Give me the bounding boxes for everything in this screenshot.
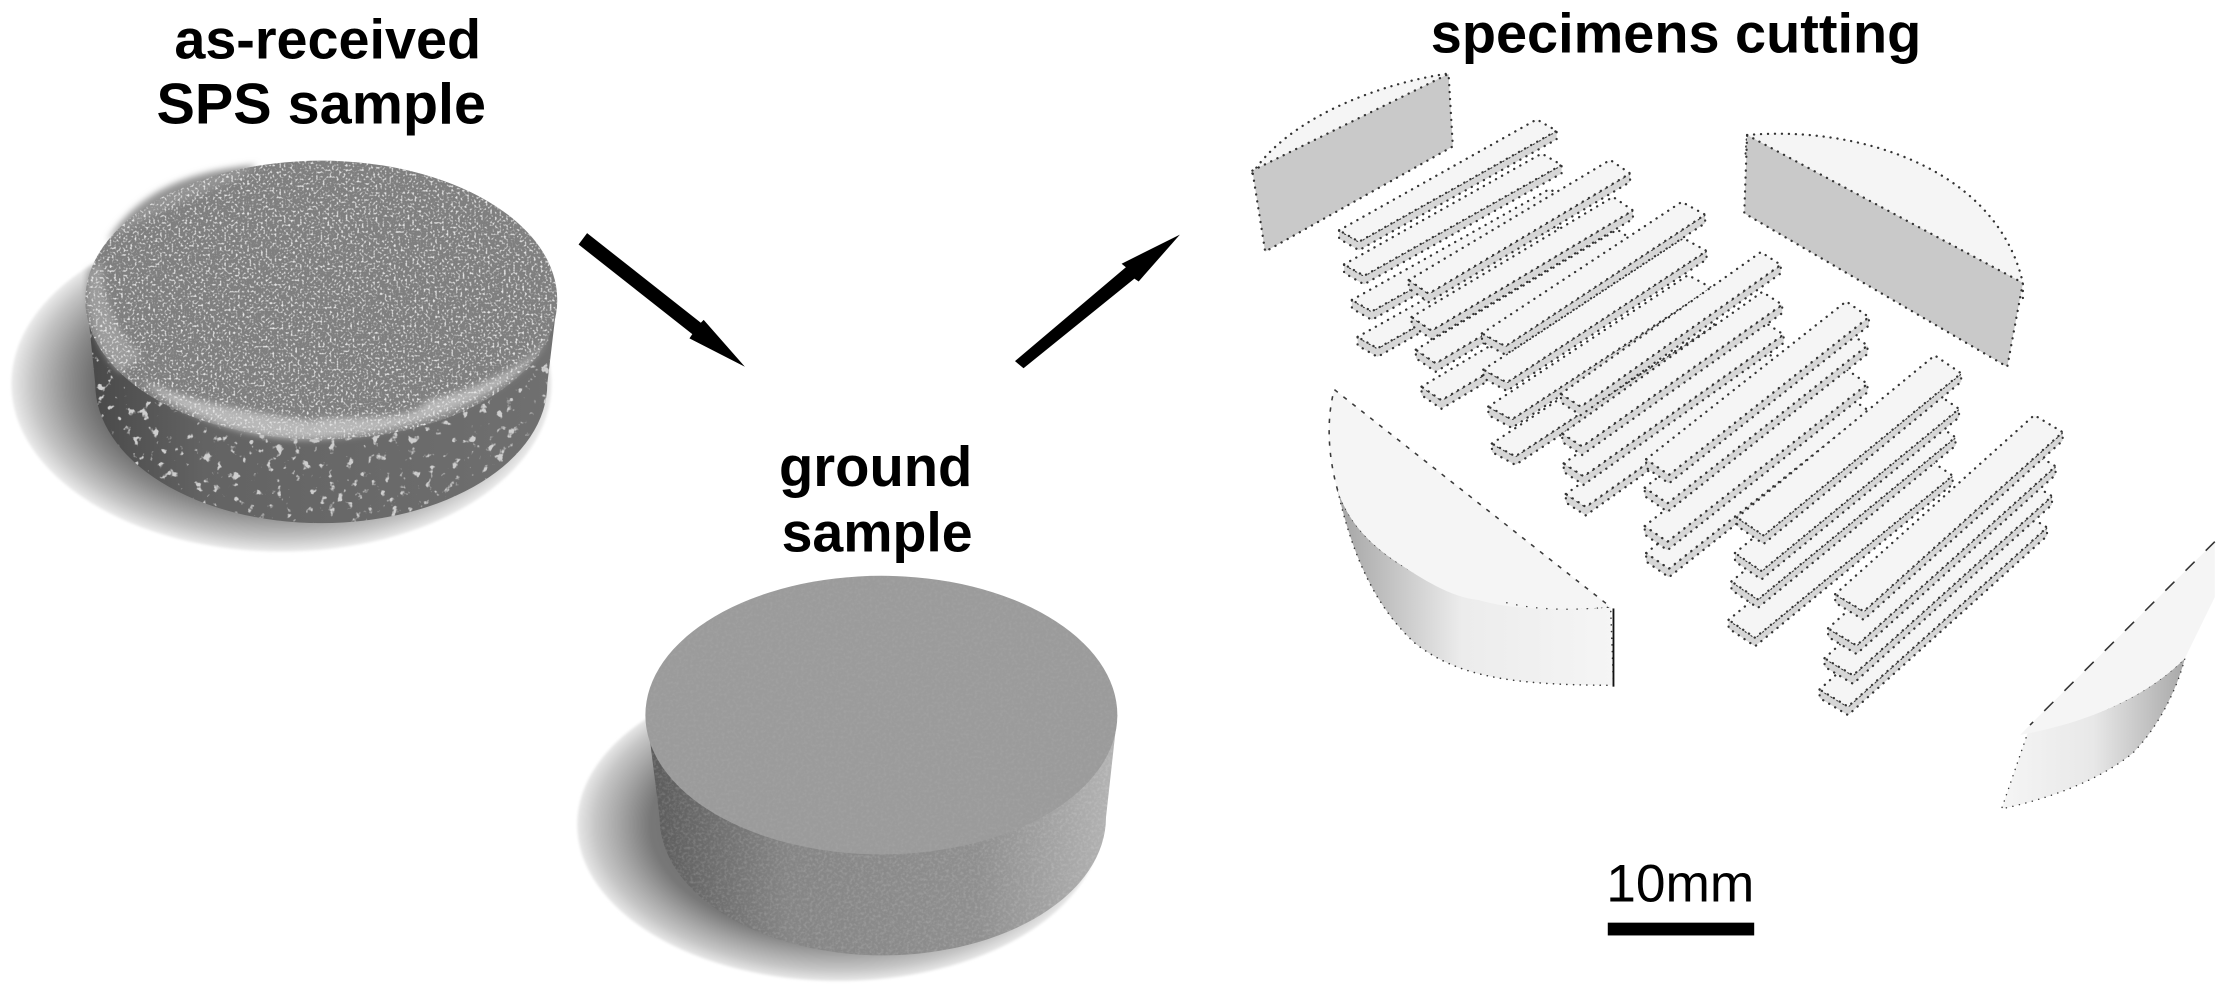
heading line 1: ground [779,435,972,498]
scale label: 10mm [1606,854,1754,913]
heading line 2: sample [782,502,973,564]
heading: as-received SPS sample [156,8,486,137]
half: bottom-right offcut [2002,542,2215,809]
half: top-left offcut [1252,74,1453,252]
bars: group 7 [1820,415,2063,715]
disk top surface [85,161,557,439]
arrow: as-received to ground [579,233,745,367]
disk shadow [577,668,1100,981]
heading line 1: as-received [174,8,481,70]
bars: group 3 [1482,202,1715,465]
disk shadow [11,216,552,552]
heading: ground sample [779,435,973,564]
photo: as-received SPS disk [11,161,557,552]
bars: group 5 [1645,301,1869,577]
disk top surface [645,576,1117,854]
heading: specimens cutting: specimens cutting [1431,2,1921,65]
bars: group 2 [1409,160,1643,409]
diagram: cut specimens [1252,74,2215,809]
bars: group 6 [1729,355,1961,646]
bars: group 1 [1339,119,1575,357]
half: top-right offcut [1744,134,2023,367]
photo: ground sample disk [577,576,1117,981]
heading line 2: SPS sample [156,73,486,137]
bars: group 4 [1561,252,1786,515]
scale bar [1608,923,1754,935]
arrow: ground to specimens [1015,235,1180,368]
half: bottom-left offcut [1329,390,1613,687]
disk side wall [647,715,1117,955]
disk side wall [87,300,557,523]
